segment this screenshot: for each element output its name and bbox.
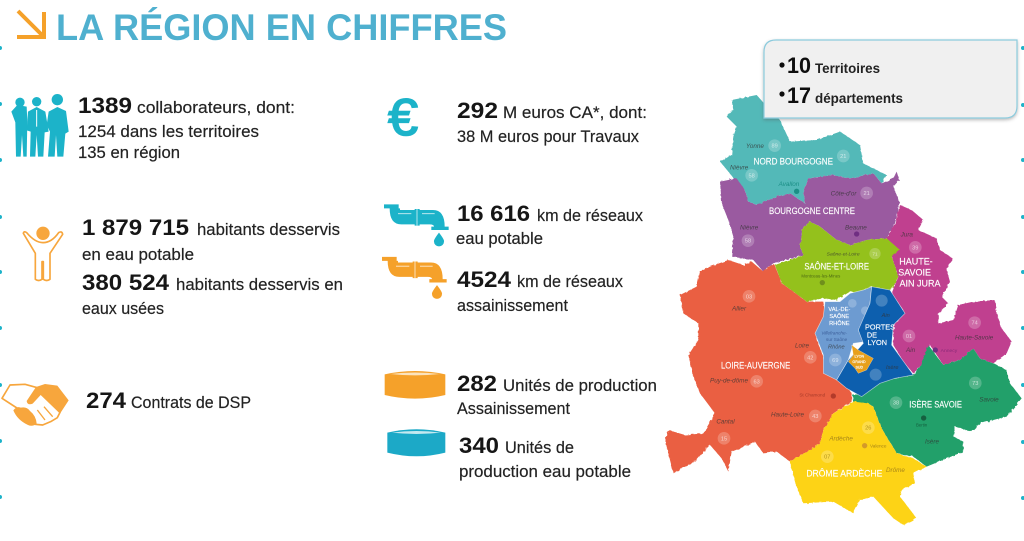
region: Saône-et-Loire: [775, 222, 900, 302]
region: Loire-Auvergne: 42: [807, 355, 813, 361]
region: Haute-Savoie Ain Jura: AIN JURA: [900, 278, 940, 288]
icon: blue tap: [384, 204, 449, 246]
region: Loire-Auvergne: St Chamond: [799, 393, 826, 398]
region: Lyon Grand Sud: GRAND: [852, 360, 866, 364]
region: Loire-Auvergne: 43: [812, 414, 818, 420]
region: Saône-et-Loire: Montceau-les-Mines: [801, 273, 840, 278]
text: habitants: habitants desservis: [197, 221, 340, 239]
region: Haute-Savoie Ain Jura: Jura: [900, 232, 913, 239]
region: Haute-Savoie Ain Jura: Ain: [905, 347, 916, 354]
region: Haute-Savoie Ain Jura: SAVOIE: [898, 267, 931, 277]
region: Bourgogne Centre: Beaune: [845, 224, 867, 231]
region: Lyon Grand Sud: SUD: [855, 366, 864, 370]
region: Bourgogne Centre: 21: [863, 191, 870, 197]
text: contrats: 274: [86, 388, 127, 413]
region: Val de Saône Rhône: Rhône: [828, 345, 845, 351]
text: collaborateurs: 135 en région: [78, 144, 180, 162]
text: collaborateurs: 1389: [78, 93, 132, 118]
region: Loire-Auvergne: Haute-Loire: [771, 411, 805, 418]
text: réseaux assainissement: 4524: [457, 267, 512, 292]
text: unités eau potable: Unités de: [505, 439, 574, 457]
region: Nord Bourgogne: 89: [772, 144, 778, 150]
region: Loire-Auvergne: 03: [746, 294, 752, 300]
text: réseaux eau potable: eau potable: [456, 230, 543, 248]
region: Portes de Lyon: DE: [867, 330, 877, 339]
text: réseaux eau potable: 16 616: [457, 201, 530, 226]
callout: territoires et départements: départements: [815, 91, 903, 106]
region: Drôme Ardèche: Ardèche: [828, 436, 853, 443]
text: chiffre d'affaires: [457, 98, 647, 146]
text: collaborateurs: 1254 dans les territoires: [78, 123, 259, 141]
title: LA RÉGION EN CHIFFRES: [56, 7, 507, 48]
region: Val de Saône Rhône: VAL-DE-: [828, 307, 850, 313]
text: unités eau potable: [459, 433, 631, 481]
region: Loire-Auvergne: 15: [721, 436, 727, 442]
region: Nord Bourgogne: Nièvre: [730, 164, 749, 171]
icon: orange tap: [382, 257, 447, 299]
icon: handshake: [2, 384, 69, 426]
icon: staff group: [11, 94, 69, 157]
region: Val de Saône Rhône: Villefranche-: [821, 331, 848, 336]
region: Loire-Auvergne: 63: [754, 379, 760, 385]
text: réseaux assainissement: assainissement: [457, 297, 568, 315]
region: Drôme Ardèche: Drôme: [886, 467, 905, 474]
region: Isère Savoie: Savoie: [979, 396, 999, 403]
region: Haute-Savoie Ain Jura: Haute-Savoie: [955, 335, 994, 342]
text: réseaux eau potable: [456, 201, 644, 248]
region: Loire-Auvergne: [665, 260, 852, 473]
region: Isère Savoie: [853, 345, 1022, 467]
text: habitants: 380 524: [82, 270, 170, 295]
region: Bourgogne Centre: Côte-d'or: [831, 190, 857, 197]
region: Drôme Ardèche: Valence: [870, 444, 887, 449]
region: Haute-Savoie Ain Jura: [887, 205, 1012, 373]
region: Val de Saône Rhône: [815, 287, 872, 380]
text: chiffre d'affaires: 292: [457, 98, 498, 123]
region: Loire-Auvergne: Puy-de-dôme: [710, 378, 748, 385]
text: unités assainissement: Unités de production: [503, 377, 657, 395]
region: Nord Bourgogne: [720, 95, 887, 205]
region: Nord Bourgogne: Avallon: [778, 181, 800, 188]
region: Loire-Auvergne: Loire: [795, 342, 810, 349]
region: Isère Savoie: Isère: [925, 439, 940, 446]
text: réseaux assainissement: km de réseaux: [517, 273, 624, 291]
text: contrats: [86, 388, 251, 413]
text: chiffre d'affaires: 38 M euros pour Travaux: [457, 128, 640, 146]
region: Saône-et-Loire: SAÔNE-ET-LOIRE: [804, 262, 869, 272]
region: Val de Saône Rhône: sur Saône: [826, 337, 848, 342]
callout: territoires et départements: 17: [787, 83, 811, 108]
text: habitants: [82, 215, 343, 318]
text: unités assainissement: [457, 371, 657, 418]
region: Drôme Ardèche: DRÔME ARDÈCHE: [806, 468, 882, 478]
region: Bourgogne Centre: [720, 172, 900, 272]
region: Val de Saône Rhône: SAÔNE: [829, 313, 849, 320]
region: Haute-Savoie Ain Jura: 01: [906, 334, 912, 340]
region: Drôme Ardèche: [790, 402, 927, 525]
region: Loire-Auvergne: Cantal: [716, 419, 735, 426]
region: Portes de Lyon: LYON: [868, 338, 887, 347]
text: contrats: Contrats de DSP: [131, 394, 251, 412]
map of territories: [665, 95, 1022, 525]
text: unités eau potable: production eau potable: [459, 463, 631, 481]
icon: arrow: [17, 11, 44, 37]
region: Haute-Savoie Ain Jura: Annecy: [941, 348, 958, 354]
text: unités assainissement: Assainissement: [457, 400, 570, 418]
region: Portes de Lyon: PORTES: [865, 322, 895, 331]
region: Nord Bourgogne: 21: [840, 154, 846, 160]
region: Bourgogne Centre: 58: [745, 239, 751, 245]
region: Saône-et-Loire: 71: [872, 252, 878, 257]
region: Loire-Auvergne: Allier: [731, 306, 747, 313]
region: Val de Saône Rhône: RHÔNE: [829, 320, 850, 327]
region: Drôme Ardèche: 07: [824, 455, 830, 461]
region: Val de Saône Rhône: 69: [832, 358, 838, 364]
text: réseaux eau potable: km de réseaux: [537, 207, 644, 225]
region: Isère Savoie: ISÈRE SAVOIE: [909, 400, 962, 410]
region: Nord Bourgogne: NORD BOURGOGNE: [754, 157, 833, 167]
text: collaborateurs: collaborateurs, dont:: [137, 99, 295, 117]
icon: orange tank: [385, 371, 445, 399]
region: Bourgogne Centre: Nièvre: [740, 224, 759, 231]
region: Drôme Ardèche: 26: [865, 426, 871, 432]
text: habitants: habitants desservis en: [176, 276, 343, 294]
text: réseaux assainissement: [457, 267, 624, 315]
text: habitants: eaux usées: [82, 300, 164, 318]
region: Lyon Grand Sud: [848, 345, 873, 373]
region: Nord Bourgogne: 58: [749, 173, 755, 179]
text: collaborateurs: [78, 93, 295, 162]
region: Nord Bourgogne: Yonne: [746, 143, 764, 150]
text: habitants: en eau potable: [82, 246, 194, 264]
text: chiffre d'affaires: M euros CA*, dont:: [503, 104, 647, 122]
region: Haute-Savoie Ain Jura: HAUTE-: [899, 257, 933, 267]
text: habitants: 1 879 715: [82, 215, 189, 240]
callout: territoires et départements: [764, 40, 1017, 118]
region: Haute-Savoie Ain Jura: 74: [971, 321, 978, 327]
region: Isère Savoie: 38: [893, 401, 899, 407]
callout: territoires et départements: Territoires: [815, 61, 880, 76]
icon: euro: €: [388, 89, 418, 147]
region: Isère Savoie: Bertin: [916, 422, 928, 427]
icon: person: [23, 227, 63, 280]
icon: blue tank: [387, 429, 445, 456]
region: Haute-Savoie Ain Jura: 39: [912, 245, 918, 251]
region: Lyon Grand Sud: LYON: [854, 354, 865, 358]
region: Portes de Lyon: Isère: [886, 365, 899, 371]
text: unités eau potable: 340: [459, 433, 499, 458]
callout: territoires et départements: 10: [787, 53, 811, 78]
region: Portes de Lyon: Ain: [881, 313, 890, 319]
region: Bourgogne Centre: BOURGOGNE CENTRE: [769, 206, 855, 216]
region: Isère Savoie: 73: [972, 381, 978, 387]
region: Portes de Lyon: [837, 287, 913, 397]
region: Saône-et-Loire: Saône-et-Loire: [827, 252, 860, 258]
region: Loire-Auvergne: LOIRE-AUVERGNE: [721, 361, 790, 371]
text: unités assainissement: 282: [457, 371, 497, 396]
